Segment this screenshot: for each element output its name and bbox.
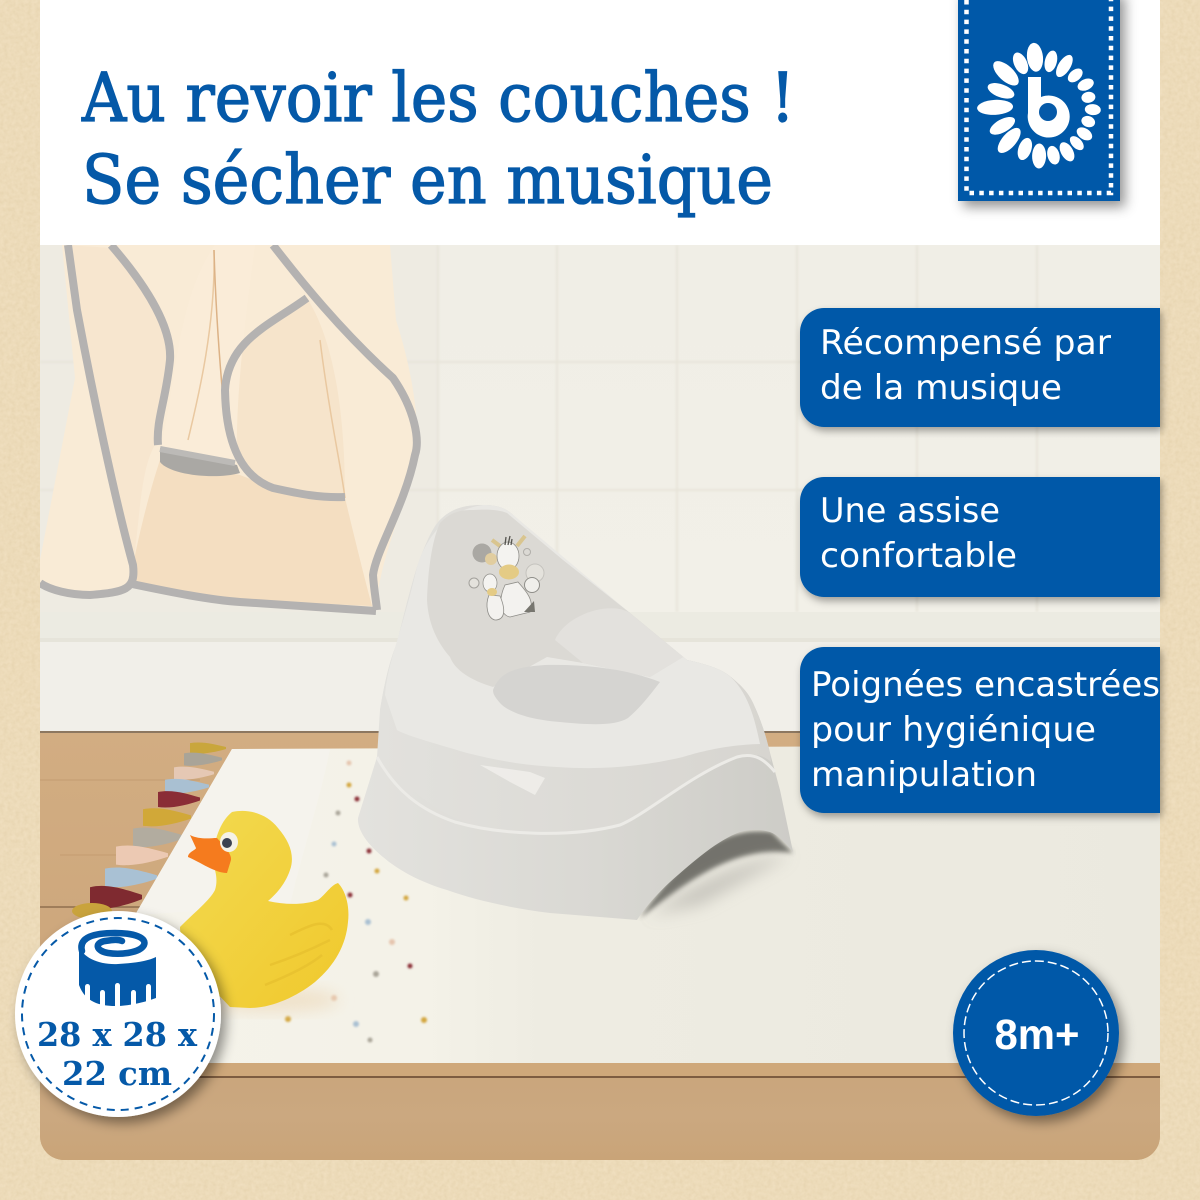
dimensions text: 22 cm [62,1054,172,1093]
potty seat opening [493,665,660,724]
callout: recessed handles: pour hygiénique [811,710,1096,750]
callout: music reward: Récompensé par [820,323,1111,363]
title [81,59,795,219]
photo scene [40,245,1160,1163]
zebra decal [469,536,544,620]
callout: music reward: de la musique [820,368,1062,408]
callout: recessed handles: manipulation [811,755,1037,795]
header panel [40,0,1160,245]
icon: measuring tape [79,933,156,1010]
dimensions text: 28 x 28 x [37,1015,197,1054]
wooden floor [40,731,1160,1163]
rug dots [285,760,427,1042]
callout: recessed handles [800,647,1160,813]
age badge [953,950,1119,1116]
brand logo label [958,0,1120,201]
icon: flower b logo [977,42,1101,169]
potty [358,505,793,920]
towel [40,245,417,612]
callout: comfortable seat: confortable [820,536,1017,576]
title: Au revoir les couches ! [81,59,795,137]
wall tiles [40,245,1160,732]
title: Se sécher en musique [82,141,773,219]
callout: comfortable seat: Une assise [820,491,1000,531]
callout: comfortable seat [800,477,1160,597]
tassels [72,742,226,919]
rug [135,745,1160,1063]
callout: recessed handles: Poignées encastrées [811,665,1160,705]
callout: music reward [800,308,1160,427]
dimensions badge [15,911,221,1117]
age badge: 8m+ [994,1011,1080,1059]
rubber duck [180,811,348,1012]
